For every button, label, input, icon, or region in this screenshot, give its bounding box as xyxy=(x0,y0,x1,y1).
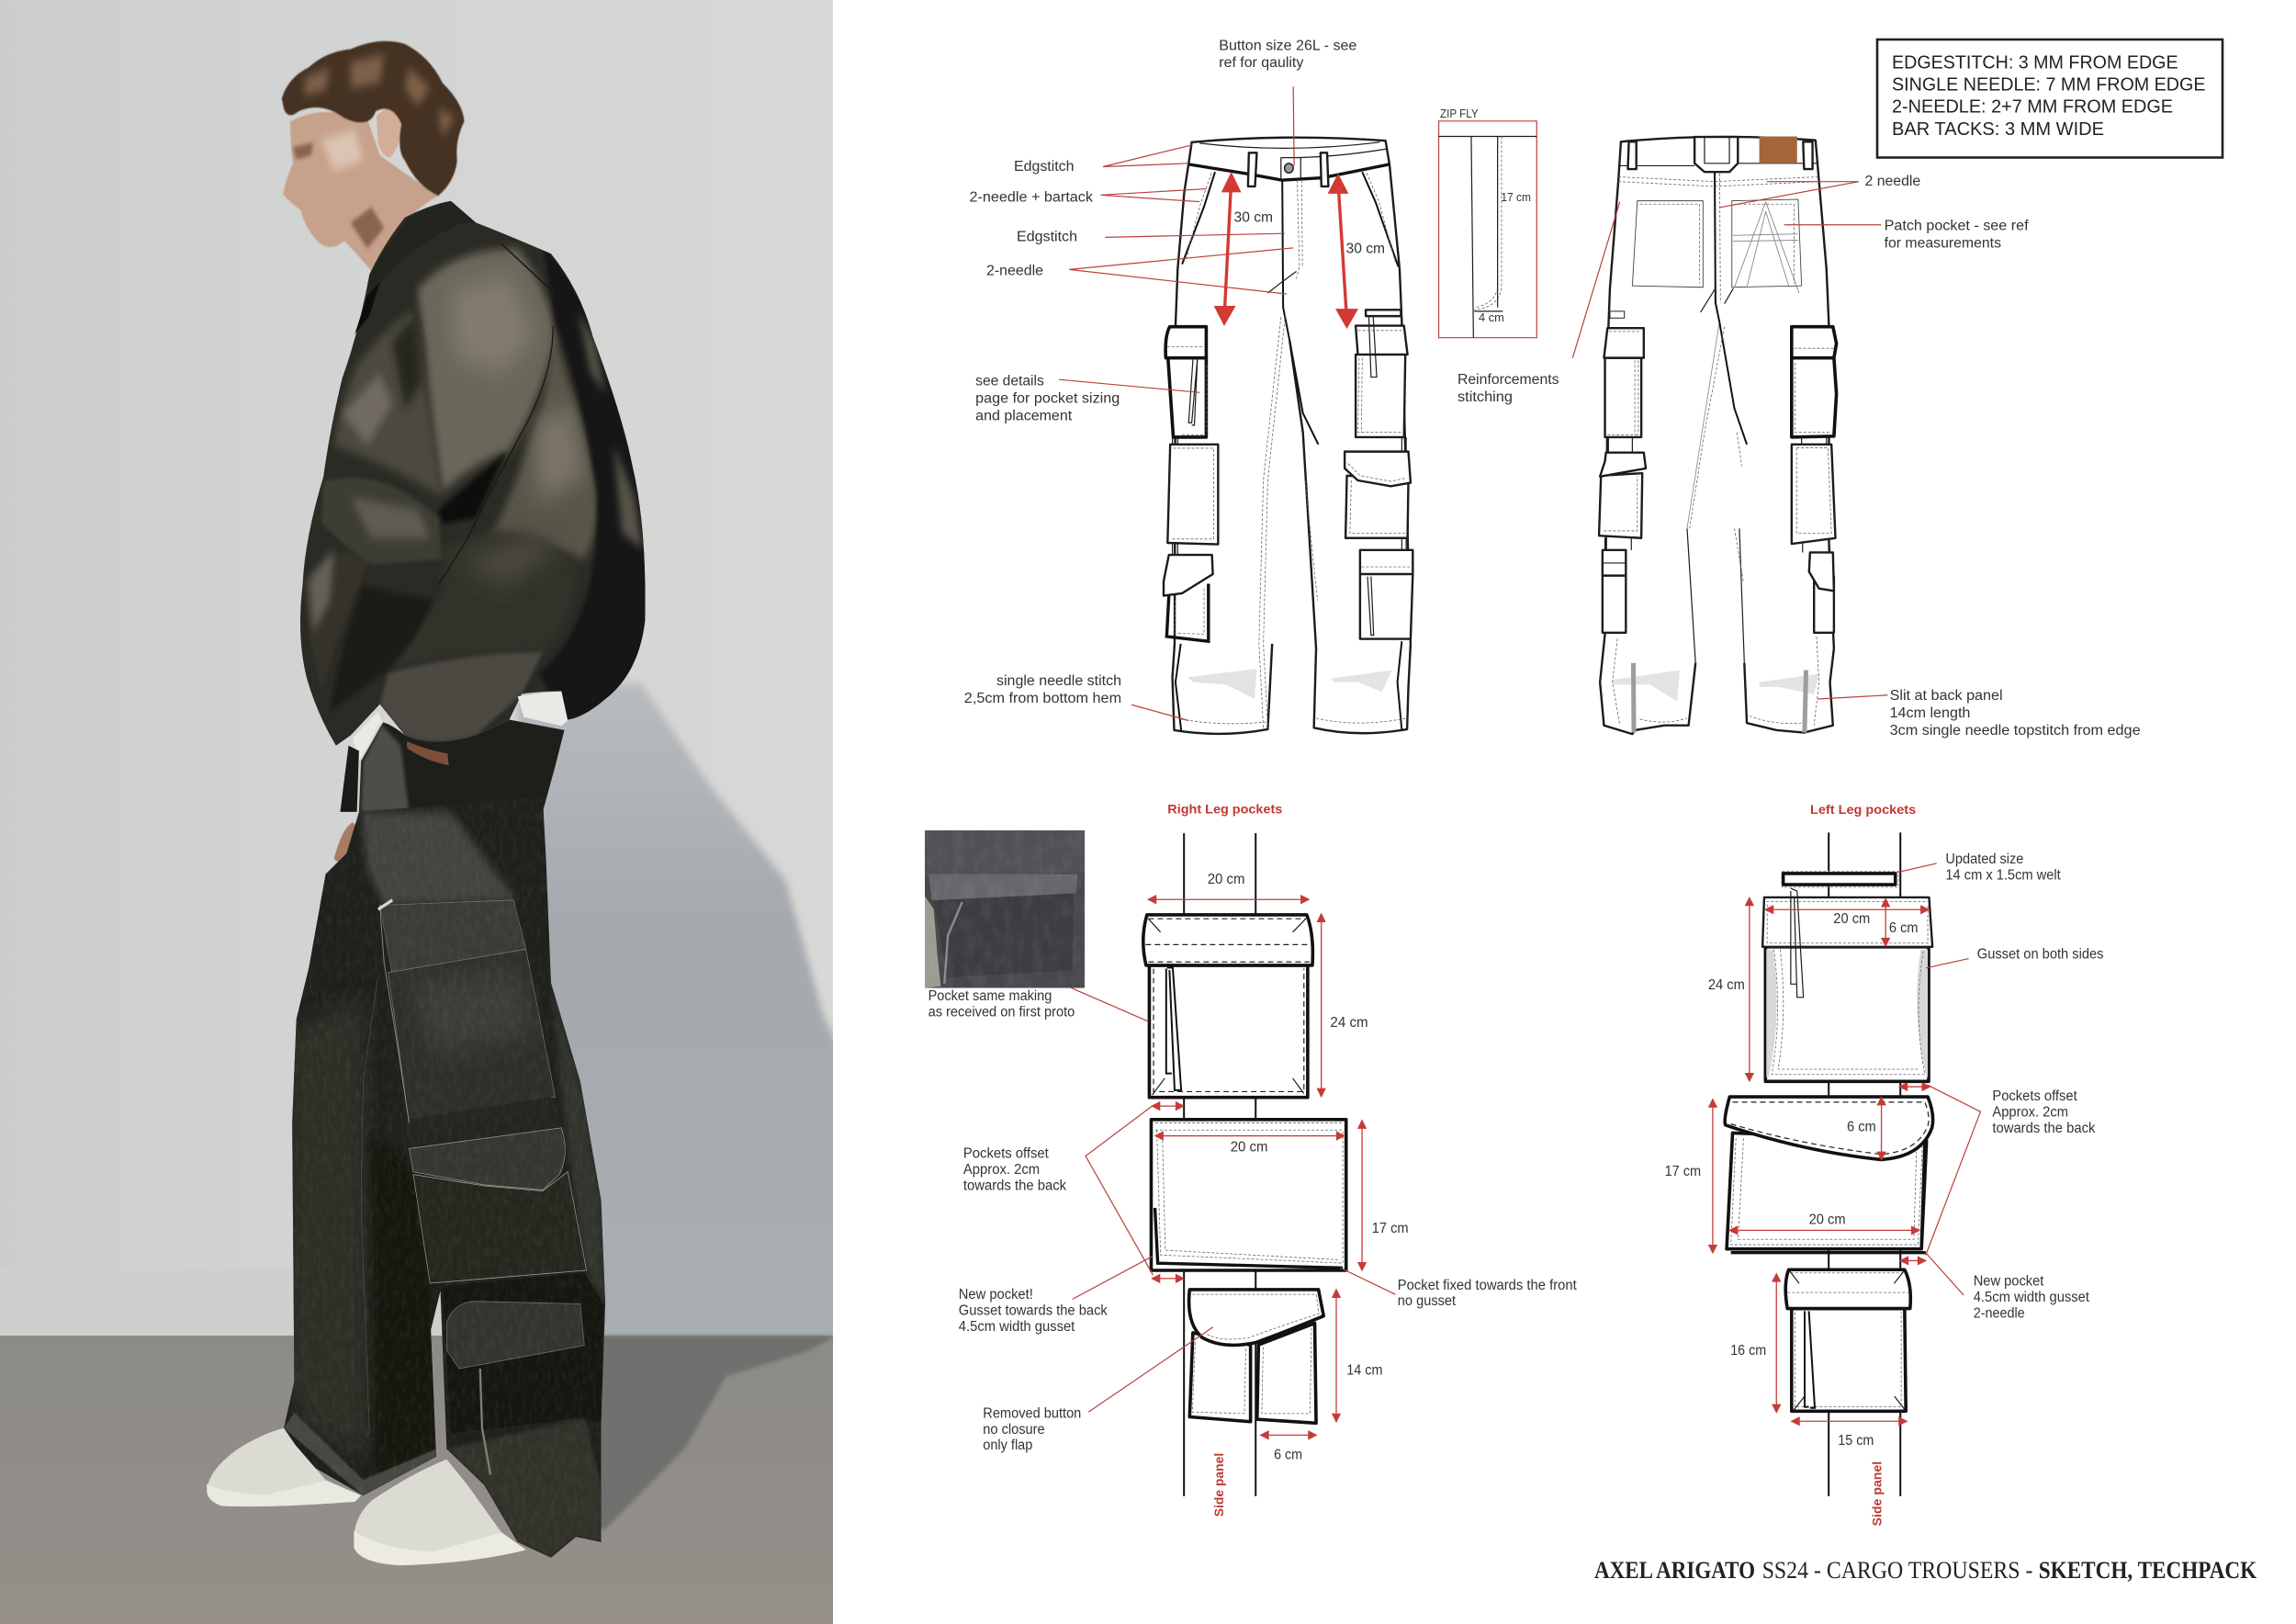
fly stitching xyxy=(1259,180,1317,727)
centre belt loop xyxy=(1694,137,1738,172)
annotation: pocket fixed xyxy=(1398,1278,1577,1309)
pocket: left leg upper xyxy=(1356,317,1408,437)
photo: hair, face and jacket xyxy=(282,41,649,812)
dimension: 15 cm: 15 cm xyxy=(1838,1433,1874,1449)
hair highlights xyxy=(305,54,455,137)
leader: slit xyxy=(1818,695,1887,699)
trouser waist xyxy=(359,720,565,812)
seams xyxy=(438,243,553,585)
annotation: new pocket gusset: 4.5cm width gusset xyxy=(959,1319,1075,1335)
sleeve highlight xyxy=(451,275,535,373)
white tee hem xyxy=(353,692,568,761)
side connector xyxy=(1173,437,1406,555)
knee shading xyxy=(1187,669,1392,699)
label: zip 17 cm: 17 cm xyxy=(1501,190,1531,204)
annotation: see details: page for pocket sizing xyxy=(975,390,1120,406)
middle pocket xyxy=(1725,1097,1933,1253)
front pockets xyxy=(1182,172,1399,266)
annotation: pockets offset left: towards the back xyxy=(1992,1121,2096,1136)
side stripes at hems xyxy=(1176,641,1401,730)
dim arrow: offset bottom xyxy=(1900,1257,1926,1264)
leader: new pocket xyxy=(1073,1256,1154,1299)
annotation: pockets offset right: Approx. 2cm xyxy=(963,1162,1040,1178)
photo: floor shadow xyxy=(592,1336,835,1529)
pocket two body xyxy=(413,1172,587,1283)
hip light xyxy=(361,812,518,905)
dimension: 17 cm left leg: 17 cm xyxy=(1665,1164,1701,1179)
annotation: 2-needle + bartack: 2-needle + bartack xyxy=(970,190,1093,206)
dimension: 24 cm left leg: 24 cm xyxy=(1708,977,1745,993)
upper inseam xyxy=(1687,321,1719,528)
annotation: new pocket left leg xyxy=(1974,1274,2090,1321)
front lower sheen xyxy=(351,497,430,538)
chest xyxy=(334,310,443,497)
dimension: 24 cm: 24 cm xyxy=(1330,1015,1368,1031)
pocket: left leg middle xyxy=(1345,452,1411,538)
slit panel stitching xyxy=(1613,637,1819,726)
annotation: pocket same making: as received on first proto xyxy=(929,1004,1075,1020)
label: zip fly: ZIP FLY xyxy=(1440,107,1479,120)
fly bartack xyxy=(1267,271,1297,293)
callout: stitching specification box: 2-NEEDLE: 2+7 MM FROM EDGE xyxy=(1892,96,2173,117)
pocket: left leg lower xyxy=(1360,550,1412,639)
eye shadow and jaw shade xyxy=(293,142,384,249)
photo zip pull xyxy=(944,902,962,984)
annotation: pocket same making xyxy=(929,988,1075,1020)
dimension: 20 cm top left leg: 20 cm xyxy=(1833,911,1870,927)
annotation: updated size: Updated size xyxy=(1945,851,2023,867)
dimension: 30 cm left: 30 cm xyxy=(1234,210,1273,226)
photo: wall shadow xyxy=(515,680,833,1336)
label: zip 4 cm: 4 cm xyxy=(1479,310,1504,324)
bottom left xyxy=(310,553,366,681)
dim arrow: offset top xyxy=(1899,1083,1930,1090)
dim arrow: 6 cm flap xyxy=(1877,1098,1885,1159)
pocket dark xyxy=(330,585,434,712)
dimension: 6 cm top left leg: 6 cm xyxy=(1889,920,1919,936)
dim arrow: 6 cm top xyxy=(1882,899,1889,946)
annotation: removed button: Removed button xyxy=(983,1406,1081,1422)
back panel highlight xyxy=(535,404,584,502)
annotation: button size xyxy=(1219,38,1356,71)
leader: same making xyxy=(1071,987,1148,1021)
annotation: pockets offset right: towards the back xyxy=(963,1179,1066,1194)
label: side panel left leg: Side panel xyxy=(1870,1461,1885,1526)
leader: button xyxy=(1292,86,1295,165)
jacket placket and button xyxy=(355,282,380,334)
dimension: 17 cm: 17 cm xyxy=(1372,1221,1409,1236)
trouser base xyxy=(284,796,605,1558)
annotation: pockets offset left: Approx. 2cm xyxy=(1992,1104,2068,1121)
cuff xyxy=(380,652,543,742)
hair xyxy=(282,41,464,196)
side connectors xyxy=(1605,437,1829,552)
label: side panel right leg: Side panel xyxy=(1211,1453,1226,1517)
back pocket left middle xyxy=(1599,453,1646,538)
leader: new pocket xyxy=(1926,1253,1964,1295)
knee shading xyxy=(1613,671,1819,702)
back pocket right upper xyxy=(1792,327,1837,437)
photo flap band xyxy=(929,874,1077,900)
panel: right leg pockets diagram xyxy=(1071,833,1395,1496)
annotation: gusset on both sides: Gusset on both sides xyxy=(1977,947,2104,963)
annotation: see details: see details xyxy=(975,373,1044,389)
annotation: new pocket gusset: Gusset towards the back xyxy=(959,1303,1108,1319)
drawcord xyxy=(480,1369,490,1475)
dim arrow: 17 cm xyxy=(1709,1100,1716,1253)
dimension: 20 cm lower left leg: 20 cm xyxy=(1809,1212,1846,1227)
dim arrow: 15 cm xyxy=(1792,1417,1907,1425)
face highlights xyxy=(321,130,363,171)
dim arrow: 20 cm top xyxy=(1148,896,1309,903)
annotation: pockets offset left xyxy=(1992,1088,2096,1136)
panel: reference pocket photo xyxy=(925,830,1085,988)
leader: removed button xyxy=(1088,1327,1213,1412)
back panel xyxy=(484,332,598,559)
annotation: new pocket left leg: New pocket xyxy=(1974,1274,2044,1290)
side belt loops xyxy=(1627,141,1813,169)
pocket three flap xyxy=(446,1302,584,1369)
callout: stitching specification box xyxy=(1877,39,2223,158)
dimension: 14 cm: 14 cm xyxy=(1346,1363,1383,1378)
zip fly arrows xyxy=(1474,137,1503,311)
trouser waist light xyxy=(361,725,409,812)
leader: pockets offset xyxy=(1926,1085,1980,1256)
outseam stitching xyxy=(361,977,377,1433)
dimension: 20 cm upper: 20 cm xyxy=(1208,872,1245,887)
belt loop stitching xyxy=(1705,137,1729,164)
leader: see details xyxy=(1059,379,1199,392)
upper pocket xyxy=(1143,915,1312,1098)
slits xyxy=(1633,663,1806,733)
pocket: right leg upper xyxy=(1165,327,1207,437)
hand xyxy=(334,822,361,862)
front pocket stitching xyxy=(1186,173,1395,262)
photo base xyxy=(925,830,1085,988)
dim arrow: 17 cm xyxy=(1358,1121,1366,1270)
back outline xyxy=(1600,137,1834,734)
annotation: slit at back panel: Slit at back panel xyxy=(1890,688,2003,704)
dimension: 16 cm: 16 cm xyxy=(1730,1343,1766,1359)
leader: reinforcements xyxy=(1572,202,1620,358)
lower pocket xyxy=(1189,1290,1323,1423)
title: brand and page: AXEL ARIGATO xyxy=(1594,1557,1755,1584)
annotation: slit at back panel: 14cm length xyxy=(1890,705,1970,721)
annotation: pockets offset left: Pockets offset xyxy=(1992,1088,2077,1104)
dim arrow: 6 cm xyxy=(1261,1431,1316,1439)
ear xyxy=(377,107,401,158)
placket shade xyxy=(392,316,422,409)
front lower xyxy=(321,478,443,564)
leader: 2 needle xyxy=(1719,182,1859,208)
leader: 2-needle bartack xyxy=(1101,189,1206,202)
panel: model photograph xyxy=(0,0,851,1624)
pocket two flap xyxy=(409,1128,565,1190)
belt loops xyxy=(1248,152,1328,186)
dimension: 20 cm middle: 20 cm xyxy=(1231,1139,1267,1155)
annotation: single needle stitch: 2,5cm from bottom hem xyxy=(964,691,1121,706)
leader: updated size xyxy=(1897,863,1937,873)
annotation: patch pocket xyxy=(1885,219,2029,251)
hem stitching xyxy=(1181,718,1406,724)
jacket shell xyxy=(300,201,649,746)
annotation: new pocket gusset xyxy=(959,1287,1108,1335)
leader: pockets offset xyxy=(1086,1106,1154,1275)
heading: left leg pockets: Left Leg pockets xyxy=(1810,802,1916,817)
dim arrow: offset top xyxy=(1152,1102,1184,1110)
sleeve lower xyxy=(392,530,577,668)
trouser outline xyxy=(1173,138,1411,734)
lower pocket xyxy=(1785,1269,1910,1411)
leader: pocket fixed xyxy=(1341,1268,1395,1294)
annotation: pockets offset right xyxy=(963,1146,1066,1194)
arrow: 30 cm right xyxy=(1330,176,1356,326)
crotch bartacks xyxy=(1701,288,1733,312)
strip below pocket xyxy=(405,1097,561,1146)
annotation: updated size: 14 cm x 1.5cm welt xyxy=(1945,867,2061,883)
side panel seams xyxy=(1184,833,1255,1496)
dim arrow: 20 cm lower xyxy=(1729,1226,1919,1234)
panel: zip fly detail xyxy=(1439,121,1536,338)
annotation: patch pocket: for measurements xyxy=(1885,235,2001,251)
leader: patch pocket xyxy=(1784,224,1881,226)
raglan sleeve light xyxy=(418,249,556,492)
dim arrow: 20 cm top xyxy=(1765,906,1929,913)
waistband xyxy=(1188,164,1390,180)
leader: gusset xyxy=(1926,959,1969,968)
denim mottling xyxy=(267,791,622,1568)
welt xyxy=(1782,872,1898,887)
dim arrow: 24 cm xyxy=(1318,914,1325,1097)
annotation: edgstitch fly: Edgstitch xyxy=(1017,230,1077,244)
annotation: pocket same making: Pocket same making xyxy=(929,988,1052,1004)
back pocket logo stitching xyxy=(1733,202,1799,293)
zip fly seams xyxy=(1439,137,1536,338)
panel: front trouser flat sketch xyxy=(1059,86,1412,734)
elbow gap xyxy=(438,453,505,524)
annotation: single needle stitch xyxy=(964,673,1121,706)
trouser fill xyxy=(1173,138,1411,734)
annotation: see details: and placement xyxy=(975,409,1073,424)
pocket: right leg middle xyxy=(1167,445,1218,545)
left shoe xyxy=(207,1428,361,1506)
annotation: new pocket left leg: 4.5cm width gusset xyxy=(1974,1290,2090,1305)
zip fly stitching xyxy=(1474,137,1502,310)
annotation: pocket fixed: no gusset xyxy=(1398,1293,1457,1309)
inseams xyxy=(1687,528,1744,663)
photo: floor xyxy=(0,1336,833,1624)
back pocket right lower xyxy=(1809,552,1834,633)
right shoe xyxy=(354,1460,526,1565)
back pocket left lower xyxy=(1603,550,1626,633)
jacket strap end xyxy=(340,746,359,812)
waistband details xyxy=(1199,142,1387,179)
chest highlight xyxy=(343,373,392,445)
annotation: slit at back panel xyxy=(1890,688,2141,739)
annotation: new pocket left leg: 2-needle xyxy=(1974,1305,2025,1321)
middle pocket xyxy=(1151,1120,1346,1270)
pocket one flap xyxy=(380,900,526,976)
dim arrow: 16 cm xyxy=(1773,1274,1780,1412)
pocket one highlight xyxy=(409,967,535,1055)
lower rear dark xyxy=(443,1273,603,1433)
leader: 2-needle xyxy=(1069,248,1293,294)
annotation: removed button xyxy=(983,1406,1081,1453)
upper pocket xyxy=(1762,888,1932,1081)
button xyxy=(1285,164,1293,173)
annotation: new pocket gusset: New pocket! xyxy=(959,1287,1033,1303)
photo: studio wall xyxy=(0,0,833,1336)
dark back xyxy=(538,243,649,725)
photo grain xyxy=(925,830,1085,988)
annotation: pockets offset right: Pockets offset xyxy=(963,1146,1049,1162)
annotation: edgstitch waistband: Edgstitch xyxy=(1014,159,1075,175)
zip pull xyxy=(378,900,392,909)
annotation: reinforcements stitching xyxy=(1458,372,1559,405)
dim arrow: offset bottom xyxy=(1152,1275,1184,1282)
lower cuff xyxy=(446,1418,601,1558)
left hem xyxy=(284,1413,436,1495)
callout: stitching specification box: BAR TACKS: 3 MM WIDE xyxy=(1892,118,2104,140)
collar xyxy=(369,201,476,306)
panel: back trouser flat sketch xyxy=(1572,137,1887,734)
annotation: button size: ref for qaulity xyxy=(1219,55,1304,71)
patch pocket left xyxy=(1632,201,1703,288)
annotation: pocket fixed: Pocket fixed towards the front xyxy=(1398,1278,1577,1293)
side tab xyxy=(1610,311,1625,318)
pocket skin xyxy=(407,741,449,765)
title: brand and page xyxy=(1594,1557,2257,1584)
yoke stitching xyxy=(1618,176,1819,186)
neck and face xyxy=(283,112,438,272)
back sheen xyxy=(579,310,643,549)
photo: trousers and shoes xyxy=(207,791,622,1568)
back pocket left upper xyxy=(1604,328,1644,437)
arrow: 30 cm left xyxy=(1216,175,1239,322)
leg dark inner xyxy=(372,1133,434,1475)
dim arrow: 24 cm xyxy=(1746,898,1753,1081)
outer hip edge xyxy=(551,983,605,1304)
leader: single needle stitch xyxy=(1131,705,1188,720)
back fill xyxy=(1600,137,1834,734)
photo background corner xyxy=(925,896,940,988)
callout: stitching specification box: SINGLE NEEDLE: 7 MM FROM EDGE xyxy=(1892,73,2206,95)
callout: stitching specification box: EDGESTITCH: 3 MM FROM EDGE xyxy=(1892,51,2178,73)
dimension: 6 cm flap left leg: 6 cm xyxy=(1847,1120,1876,1135)
dimension: 30 cm right: 30 cm xyxy=(1346,242,1385,257)
annotation: reinforcements stitching: stitching xyxy=(1458,389,1513,405)
leader: edgstitch waistband xyxy=(1103,145,1192,166)
heading: right leg pockets: Right Leg pockets xyxy=(1167,802,1283,817)
welt pocket xyxy=(1366,310,1401,316)
dimension: 6 cm: 6 cm xyxy=(1274,1448,1302,1463)
annotation: 2 needle: 2 needle xyxy=(1864,174,1920,189)
photo: skirting band xyxy=(0,1269,551,1336)
side panel seams xyxy=(1829,832,1900,1496)
sleeve lower sheen xyxy=(459,534,559,585)
pocket: right leg lower xyxy=(1164,555,1213,641)
annotation: removed button: only flap xyxy=(983,1438,1032,1453)
patch pocket right xyxy=(1732,199,1802,288)
annotation: updated size xyxy=(1945,851,2061,883)
annotation: patch pocket: Patch pocket - see ref xyxy=(1885,219,2029,233)
photo top band xyxy=(925,830,1085,876)
panel: left leg pockets diagram xyxy=(1709,832,1980,1496)
annotation: removed button: no closure xyxy=(983,1422,1045,1438)
back pocket right middle xyxy=(1792,445,1836,544)
bottom left sheen xyxy=(309,549,334,632)
annotation: reinforcements stitching: Reinforcements xyxy=(1458,372,1559,388)
pocket one body xyxy=(388,949,556,1122)
annotation: see details xyxy=(975,373,1120,424)
annotation: slit at back panel: 3cm single needle topstitch from edge xyxy=(1890,723,2141,739)
leather label xyxy=(1760,137,1797,164)
title: brand and page: SKETCH, TECHPACK xyxy=(2039,1557,2257,1584)
waistband bottom xyxy=(1620,164,1817,165)
annotation: 2-needle: 2-needle xyxy=(986,264,1043,279)
leader: edgstitch fly xyxy=(1105,233,1285,237)
dim arrow: 14 cm xyxy=(1333,1290,1340,1422)
photo pocket body xyxy=(934,894,1074,977)
annotation: button size: Button size 26L - see xyxy=(1219,38,1356,53)
zip tape xyxy=(380,905,409,1122)
annotation: single needle stitch: single needle stitch xyxy=(996,673,1121,689)
seam stitching xyxy=(1690,137,1743,581)
patch pocket stitching xyxy=(1640,204,1795,284)
zip fly frame xyxy=(1439,121,1536,338)
title: brand and page: SS24 - CARGO TROUSERS - xyxy=(1762,1557,2032,1584)
fly and crotch seam xyxy=(1282,180,1318,445)
centre back seam xyxy=(1715,137,1747,445)
left leg light xyxy=(288,998,369,1454)
dim arrow: 20 cm middle xyxy=(1155,1132,1345,1140)
